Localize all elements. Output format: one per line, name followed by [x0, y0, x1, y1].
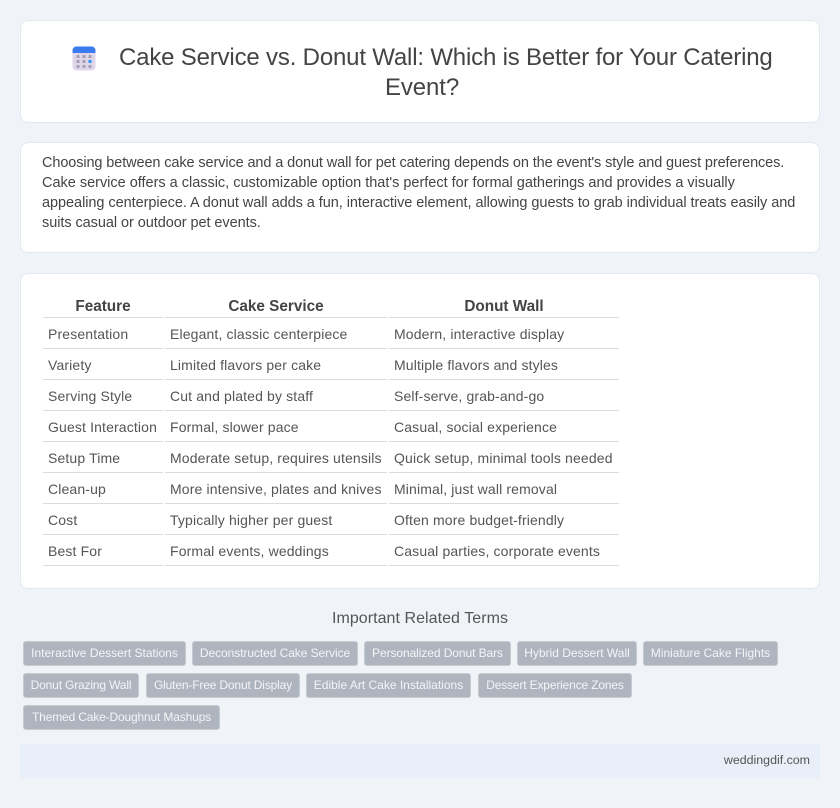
- heading: Event?: [385, 74, 459, 101]
- tag: [364, 641, 511, 666]
- tag: [306, 673, 471, 698]
- intro text: Cake service offers a classic, customizable option that's perfect for formal gatherings and provides a visually: [42, 175, 735, 191]
- row: best for: [43, 534, 619, 566]
- comparison table: [43, 298, 619, 566]
- table header: Feature: [75, 298, 131, 315]
- heading: Cake Service vs. Donut Wall: Which is Better for Your Catering: [119, 44, 773, 71]
- footer source: weddingdif.com: [724, 753, 810, 767]
- row: setup time: Quick setup, minimal tools needed: [394, 450, 613, 466]
- tag: [23, 673, 139, 698]
- tag: [23, 705, 220, 730]
- tag: Interactive Dessert Stations: [31, 646, 178, 660]
- row: cost: Typically higher per guest: [170, 512, 332, 528]
- footer bar: [20, 744, 820, 778]
- row: serving style: Self-serve, grab-and-go: [394, 388, 544, 404]
- row: serving style: [43, 379, 619, 404]
- row: clean-up: [43, 472, 619, 497]
- tag: Personalized Donut Bars: [372, 646, 503, 660]
- intro text: suits casual or outdoor pet events.: [42, 215, 261, 231]
- tag: Deconstructed Cake Service: [200, 646, 350, 660]
- tag: Donut Grazing Wall: [31, 678, 131, 692]
- table header: [75, 298, 544, 315]
- related terms tags: [23, 641, 778, 730]
- row: presentation: Elegant, classic centerpiece: [170, 326, 347, 342]
- row: cost: Cost: [48, 512, 77, 528]
- row: guest interaction: Casual, social experience: [394, 419, 557, 435]
- row: variety: Limited flavors per cake: [170, 357, 321, 373]
- related terms heading: Important Related Terms: [332, 610, 508, 627]
- tag: Themed Cake-Doughnut Mashups: [32, 710, 211, 724]
- row: setup time: Setup Time: [48, 450, 120, 466]
- row: clean-up: Minimal, just wall removal: [394, 481, 557, 497]
- tag: Hybrid Dessert Wall: [524, 646, 630, 660]
- tag: [146, 673, 300, 698]
- table header: Donut Wall: [464, 298, 544, 315]
- row: serving style: Cut and plated by staff: [170, 388, 313, 404]
- row: guest interaction: [43, 410, 619, 435]
- intro panel: [20, 142, 820, 253]
- panel: comparison table: [20, 273, 820, 589]
- row: variety: Multiple flavors and styles: [394, 357, 558, 373]
- row: guest interaction: Guest Interaction: [48, 419, 157, 435]
- table header: Cake Service: [228, 298, 324, 315]
- row: variety: Variety: [48, 357, 92, 373]
- icon: calendar: [72, 46, 96, 70]
- intro text: Choosing between cake service and a donut wall for pet catering depends on the event's style and guest preferences.: [42, 155, 784, 171]
- heading: [119, 44, 773, 101]
- row: variety: [43, 348, 619, 373]
- row: serving style: Serving Style: [48, 388, 132, 404]
- tag: [478, 673, 632, 698]
- tag: Miniature Cake Flights: [651, 646, 770, 660]
- row: cost: [43, 503, 619, 528]
- intro text: appealing centerpiece. A donut wall adds a fun, interactive element, allowing guests to grab individual treats easily and: [42, 195, 795, 211]
- tag: [192, 641, 358, 666]
- row: guest interaction: Formal, slower pace: [170, 419, 299, 435]
- title card: [20, 20, 820, 123]
- row: cost: Often more budget-friendly: [394, 512, 564, 528]
- tag: [23, 641, 186, 666]
- tag: Edible Art Cake Installations: [314, 678, 463, 692]
- row: setup time: [43, 441, 619, 466]
- tag: [643, 641, 778, 666]
- row: clean-up: Clean-up: [48, 481, 106, 497]
- row: best for: Casual parties, corporate events: [394, 543, 600, 559]
- tag: Dessert Experience Zones: [486, 678, 624, 692]
- row: presentation: [43, 317, 619, 342]
- row: setup time: Moderate setup, requires utensils: [170, 450, 382, 466]
- tag: Gluten-Free Donut Display: [154, 678, 292, 692]
- row: clean-up: More intensive, plates and knives: [170, 481, 382, 497]
- row: presentation: Modern, interactive display: [394, 326, 564, 342]
- row: best for: Formal events, weddings: [170, 543, 329, 559]
- row: presentation: Presentation: [48, 326, 128, 342]
- tag: [517, 641, 637, 666]
- intro text: [42, 155, 795, 231]
- row: best for: Best For: [48, 543, 102, 559]
